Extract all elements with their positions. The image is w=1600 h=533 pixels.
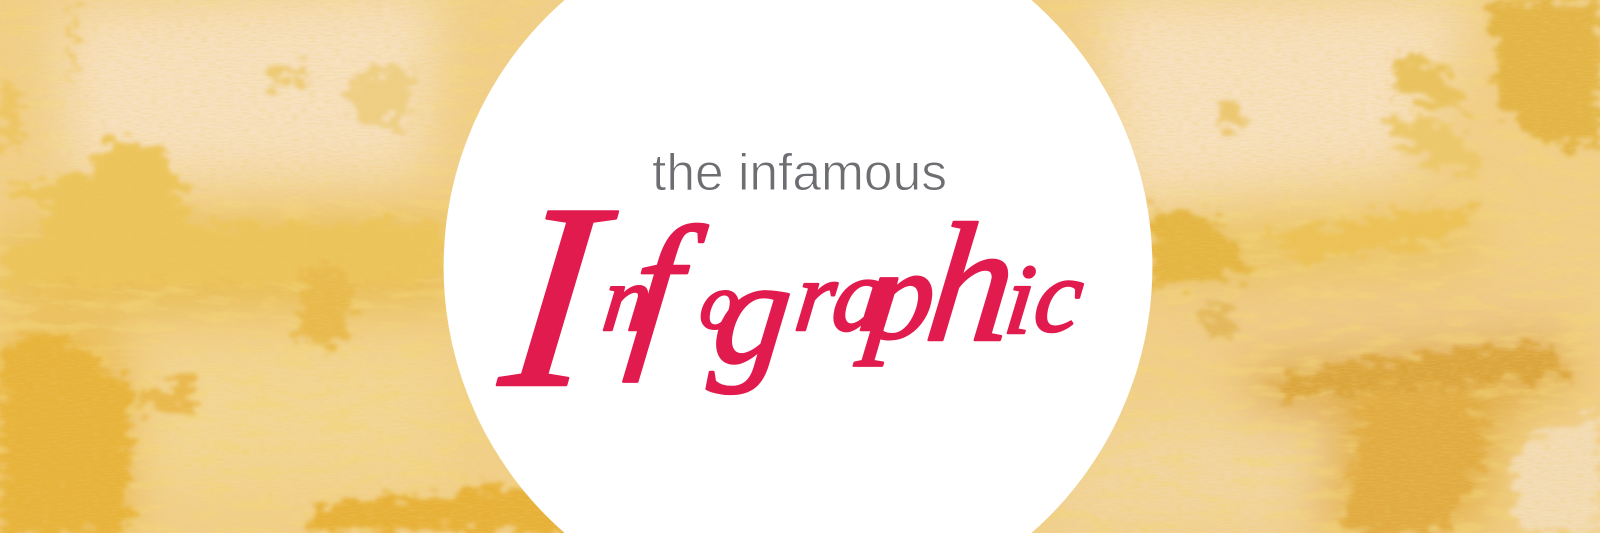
title: Infographic: i bbox=[1000, 244, 1041, 355]
title: Infographic: h bbox=[918, 189, 1026, 377]
title: Infographic: g bbox=[706, 229, 801, 395]
title: Infographic: p bbox=[853, 223, 944, 367]
title: Infographic: r bbox=[790, 241, 843, 352]
title: Infographic: I bbox=[487, 149, 626, 443]
subtitle: the infamous: the infamous bbox=[652, 144, 947, 202]
title: Infographic: o bbox=[696, 258, 746, 345]
title: Infographic: a bbox=[827, 236, 894, 353]
title: Infographic: n bbox=[598, 248, 657, 351]
title: Infographic: f bbox=[621, 193, 712, 383]
title: Infographic: c bbox=[1029, 237, 1090, 354]
white circle bbox=[444, 0, 1152, 533]
